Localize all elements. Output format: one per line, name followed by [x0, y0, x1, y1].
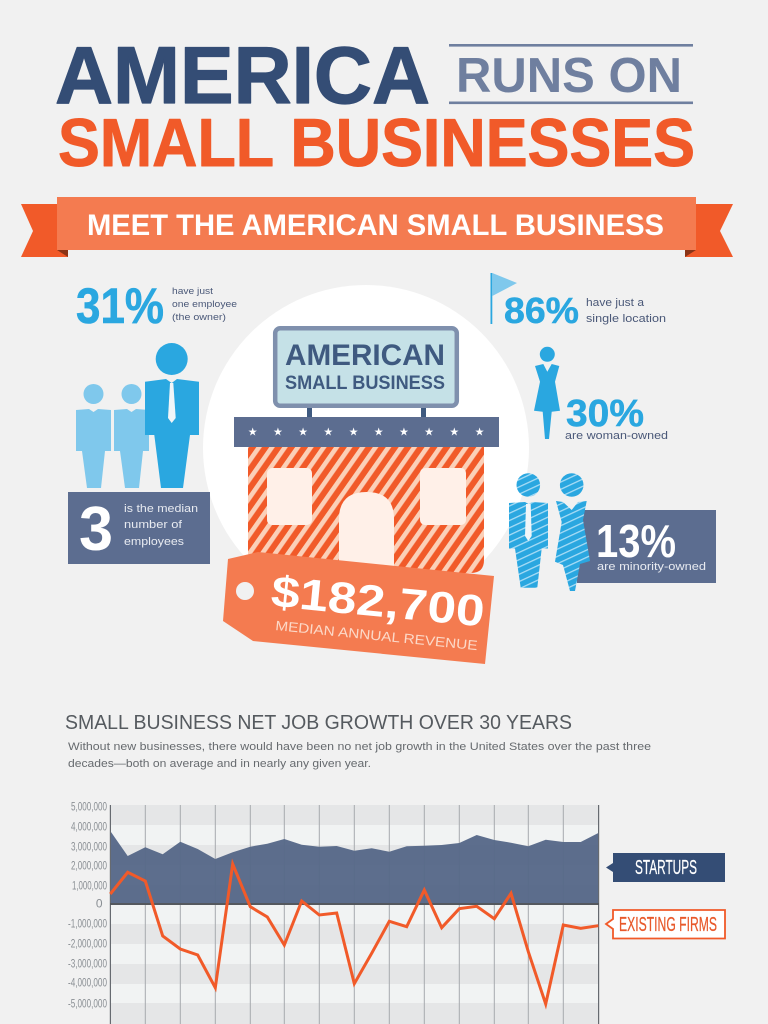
legend: startups: STARTUPS [635, 857, 697, 879]
icon: three people [76, 343, 199, 488]
stat box: median employees [68, 492, 210, 564]
awning with stars: ★ [298, 426, 308, 438]
stat: 31 percent: have just [172, 286, 213, 297]
legend: existing firms [606, 910, 725, 938]
stat box: median employees: is the median [124, 503, 198, 515]
y-axis labels: -2,000,000 [68, 936, 107, 950]
white circle backdrop [203, 285, 529, 611]
chart description: Without new businesses, there would have been no net job growth in the United States over the past three [68, 741, 651, 753]
y-axis labels: -5,000,000 [68, 996, 107, 1010]
shop window right [420, 468, 466, 525]
legend: startups [606, 853, 725, 882]
sign posts [307, 406, 426, 418]
stat: 86 percent: 86% [504, 290, 579, 331]
y-axis labels: 3,000,000 [71, 840, 107, 854]
awning with stars: ★ [349, 426, 359, 438]
startups area [110, 831, 598, 904]
banner heading: MEET THE AMERICAN SMALL BUSINESS [87, 209, 664, 242]
y-axis labels: -1,000,000 [68, 916, 107, 930]
stat: 30 percent: are woman-owned [565, 430, 668, 442]
y-axis labels: -3,000,000 [68, 956, 107, 970]
ribbon banner [21, 197, 733, 257]
grid lines [145, 805, 563, 1024]
revenue figure: $182,700 [269, 567, 487, 636]
awning with stars: ★ [449, 426, 459, 438]
chart description [68, 741, 651, 770]
awning with stars: ★ [475, 426, 485, 438]
stat box: median employees: 3 [79, 495, 113, 564]
y-axis labels: -4,000,000 [68, 976, 107, 990]
stat: 86 percent [504, 290, 666, 331]
title: small businesses: SMALL BUSINESSES [58, 105, 695, 181]
y-axis labels: 2,000,000 [71, 858, 107, 872]
title: runs on: RUNS ON [456, 49, 682, 103]
stat box: median employees: employees [124, 536, 185, 548]
stat: 86 percent: single location [586, 313, 666, 325]
awning with stars: ★ [424, 426, 434, 438]
awning with stars: ★ [273, 426, 283, 438]
awning with stars [234, 417, 499, 447]
shop sign: AMERICAN [285, 339, 445, 372]
title: America: AMERICA [55, 31, 430, 121]
stat box: minority-owned: are minority-owned [597, 561, 706, 573]
y-axis labels: 1,000,000 [72, 878, 107, 892]
shop door [339, 492, 394, 575]
revenue label: MEDIAN ANNUAL REVENUE [275, 618, 478, 653]
stat: 31 percent [76, 278, 237, 334]
chart description: decades—both on average and in nearly any given year. [68, 758, 371, 770]
stat: 86 percent: have just a [586, 297, 645, 309]
title [55, 31, 695, 181]
shop building [248, 447, 484, 573]
price tag [223, 552, 494, 664]
awning with stars: ★ [399, 426, 409, 438]
icon: woman [534, 347, 560, 439]
stat box: minority-owned [577, 510, 716, 583]
stat: 31 percent: (the owner) [172, 312, 226, 323]
chart bands [110, 805, 598, 1024]
awning with stars: ★ [374, 426, 384, 438]
shop window left [267, 468, 312, 525]
y-axis labels: 0 [96, 896, 103, 910]
awning with stars: ★ [323, 426, 333, 438]
stat box: median employees: number of [124, 519, 183, 531]
shop sign: SMALL BUSINESS [285, 372, 445, 394]
icon: flag [490, 273, 517, 324]
stat: 30 percent: 30% [566, 393, 644, 435]
awning with stars: ★ [248, 426, 258, 438]
y-axis labels [68, 800, 107, 1010]
icon: minority couple [509, 473, 590, 591]
stat box: minority-owned: 13% [596, 515, 676, 567]
stat: 31 percent: 31% [76, 278, 164, 334]
area and line chart [68, 800, 599, 1024]
y-axis labels: 4,000,000 [71, 820, 107, 834]
existing firms line [110, 864, 598, 1004]
stat: 30 percent [565, 393, 668, 442]
y-axis labels: 5,000,000 [71, 800, 107, 814]
axes [110, 805, 599, 1024]
stat: 31 percent: one employee [172, 299, 237, 310]
storefront [234, 328, 499, 575]
shop sign [275, 328, 457, 406]
chart heading: SMALL BUSINESS NET JOB GROWTH OVER 30 YEARS [65, 712, 572, 734]
